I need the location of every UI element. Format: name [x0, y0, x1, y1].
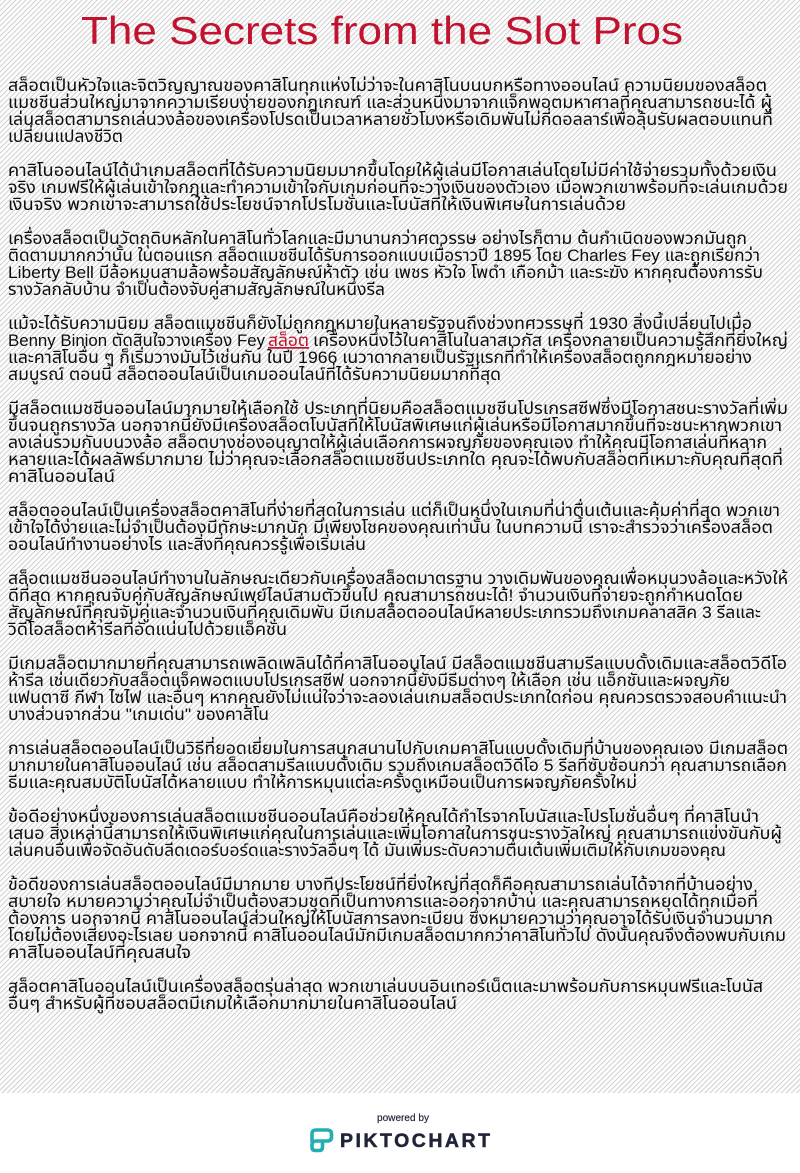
paragraph 2: จริง เกมฟรีให้ผู้เล่นเข้าใจกฎและทำความเข้าใจกับเกมก่อนที่จะวางเงินของตัวเอง เมื่อพวกเขาพร้อมที่จะเล่นเกมด้วย — [8, 175, 788, 199]
paragraph 10 — [8, 804, 782, 861]
paragraph 8: ห้ารีล เช่นเดียวกับสล็อตแจ็คพอตแบบโปรเกรสซีฟ นอกจากนี้ยังมีธีมต่างๆ ให้เลือก เช่น แอ็กชันและผจญภัย — [8, 668, 730, 690]
paragraph 12: สล็อตคาสิโนออนไลน์เป็นเครื่องสล็อตรุ่นล่าสุด พวกเขาเล่นบนอินเทอร์เน็ตและมาพร้อมกับการหมุนฟรีและโบนัส — [8, 974, 763, 997]
paragraph 6: สล็อตออนไลน์เป็นเครื่องสล็อตคาสิโนที่ง่ายที่สุดในการเล่น แต่ก็เป็นหนึ่งในเกมที่น่าตื่นเต้นและคุ้มค่าที่สุด พวกเขา — [8, 498, 780, 521]
paragraph 4: และคาสิโนอื่น ๆ ก็เริ่มวางมันไว้เช่นกัน ในปี 1966 เนวาดากลายเป็นรัฐแรกที่ทำให้เครื่องสล็อตถูกกฎหมายอย่าง — [8, 345, 752, 369]
paragraph 4: สล็อต — [268, 331, 309, 350]
paragraph 5 — [8, 396, 788, 486]
paragraph 1: เปลี่ยนแปลงชีวิต — [8, 124, 123, 146]
paragraph 11: ข้อดีของการเล่นสล็อตออนไลน์มีมากมาย บางทีประโยชน์ที่ยิ่งใหญ่ที่สุดก็คือคุณสามารถเล่นได้จากที่บ้านอย่าง — [8, 872, 753, 895]
paragraph 7: สล็อตแมชชีนออนไลน์ทำงานในลักษณะเดียวกับเครื่องสล็อตมาตรฐาน วางเดิมพันของคุณเพื่อหมุนวงล้อและหวังให้ — [8, 566, 788, 589]
paragraph 10: เสนอ สิ่งเหล่านี้สามารถให้เงินพิเศษแก่คุณในการเล่นและเพิ่มโอกาสในการชนะรางวัลใหญ่ คุณสามารถแข่งขันกับผู้ — [8, 821, 782, 845]
paragraph 7 — [8, 566, 788, 639]
paragraph 5: หลายและได้ผลลัพธ์มากมาย ไม่ว่าคุณจะเลือกสล็อตแมชชีนประเภทใด คุณจะได้พบกับสล็อตที่เหมาะกับคุณที่สุดที่ — [8, 447, 783, 470]
powered by label: powered by — [377, 1112, 430, 1124]
paragraph 8: บางส่วนจากส่วน "เกมเด่น" ของคาสิโน — [8, 705, 269, 724]
paragraph 3: ติดตามมากกว่านั้น ในตอนแรก สล็อตแมชชีนได้รับการออกแบบเมื่อราวปี 1895 โดย Charles Fey และถูกเรียกว่า — [8, 243, 760, 267]
paragraph 4: Benny Binion ตัดสินใจวางเครื่อง Fey — [8, 328, 265, 350]
paragraph 6: ออนไลน์ทำงานอย่างไร และสิ่งที่คุณควรรู้เพื่อเริ่มเล่น — [8, 532, 366, 556]
paragraph 9: มากมายในคาสิโนออนไลน์ เช่น สล็อตสามรีลแบบดั้งเดิม รวมถึงเกมสล็อตวิดีโอ 5 รีลที่ซับซ้อนกว่า คุณสามารถเลือก — [8, 753, 787, 776]
paragraph 6 — [8, 498, 780, 556]
paragraph 8: แฟนตาซี กีฬา ไซไฟ และอื่นๆ หากคุณยังไม่แน่ใจว่าจะลองเล่นเกมสล็อตประเภทใดก่อน คุณควรตรวจสอบคำแนะนำ — [8, 685, 787, 708]
paragraph 6: เข้าใจได้ง่ายและไม่จำเป็นต้องมีทักษะมากนัก มีเพียงโชคของคุณเท่านั้น ในบทความนี้ เราจะสำรวจว่าเครื่องสล็อต — [8, 515, 773, 538]
paragraph 3: รางวัลกลับบ้าน จำเป็นต้องจับคู่สามสัญลักษณ์ในหนึ่งรีล — [8, 277, 385, 301]
paragraph 1: เล่นสล็อตสามารถเล่นวงล้อของเครื่องโปรดเป็นเวลาหลายชั่วโมงหรือเดิมพันไม่กี่ดอลลาร์เพื่อลุ้นรับผลตอบแทนที่ — [8, 107, 773, 130]
paragraph 11: ต้องการ นอกจากนี้ คาสิโนออนไลน์ส่วนใหญ่ให้โบนัสการลงทะเบียน ซึ่งหมายความว่าคุณอาจได้รับเงินจำนวนมาก — [8, 906, 773, 929]
paragraph 9: ธีมและคุณสมบัติโบนัสได้หลายแบบ ทำให้การหมุนแต่ละครั้งดูเหมือนเป็นการผจญภัยครั้งใหม่ — [8, 771, 637, 794]
paragraph 1: แมชชีนส่วนใหญ่มาจากความเรียบง่ายของกฎเกณฑ์ และส่วนหนึ่งมาจากแจ็กพอตมหาศาลที่คุณสามารถชนะได้ ผู้ — [8, 90, 772, 114]
paragraph 9 — [8, 736, 788, 794]
icon: Piktochart logo — [312, 1130, 332, 1150]
title: The Secrets from the Slot Pros — [81, 10, 683, 53]
paragraph 8 — [8, 651, 787, 724]
paragraph 7: สัญลักษณ์ที่คุณจับคู่และจำนวนเงินที่คุณเดิมพัน มีเกมสล็อตออนไลน์หลายประเภทรวมถึงเกมคลาสสิค 3 รีลและ — [8, 600, 761, 624]
paragraph 11: สบายใจ หมายความว่าคุณไม่จำเป็นต้องสวมชุดที่เป็นทางการและออกจากบ้าน และคุณสามารถหยุดได้ทุกเมื่อที่ — [8, 889, 758, 912]
paragraph 8: มีเกมสล็อตมากมายที่คุณสามารถเพลิดเพลินได้ที่คาสิโนออนไลน์ มีสล็อตแมชชีนสามรีลแบบดั้งเดิมและสล็อตวิดีโอ — [8, 651, 787, 674]
paragraph 11 — [8, 872, 786, 963]
paragraph 4: เครื่องหนึ่งไว้ในคาสิโนในลาสเวกัส เครื่องกลายเป็นความรู้สึกที่ยิ่งใหญ่ — [313, 328, 788, 352]
paragraph 1: สล็อตเป็นหัวใจและจิตวิญญาณของคาสิโนทุกแห่งไม่ว่าจะในคาสิโนบนบกหรือทางออนไลน์ ความนิยมของสล็อต — [8, 76, 767, 96]
Piktochart wordmark: PIKTOCHART — [340, 1130, 490, 1152]
paragraph 2: เงินจริง พวกเขาจะสามารถใช้ประโยชน์จากโปรโมชั่นและโบนัสที่ให้เงินพิเศษในการเล่นด้วย — [8, 192, 626, 214]
paragraph 3 — [8, 226, 763, 301]
paragraph 9: การเล่นสล็อตออนไลน์เป็นวิธีที่ยอดเยี่ยมในการสนุกสนานไปกับเกมคาสิโนแบบดั้งเดิมที่บ้านของคุณเอง มีเกมสล็อต — [8, 736, 788, 759]
paragraph 5: มีสล็อตแมชชีนออนไลน์มากมายให้เลือกใช้ ประเภทที่นิยมคือสล็อตแมชชีนโปรเกรสซีฟซึ่งมีโอกาสชนะรางวัลที่เพิ่ม — [8, 396, 788, 418]
paragraph 5: ขึ้นจนถูกรางวัล นอกจากนี้ยังมีเครื่องสล็อตโบนัสที่ให้โบนัสพิเศษแก่ผู้เล่นหรือมีโอกาสมากขึ้นที่จะชนะหากพวกเขา — [8, 413, 782, 437]
paragraph 2: คาสิโนออนไลน์ได้นำเกมสล็อตที่ได้รับความนิยมมากขึ้นโดยให้ผู้เล่นมีโอกาสเล่นโดยไม่มีค่าใช้จ่ายรวมทั้งด้วยเงิน — [8, 158, 777, 182]
paragraph 12 — [8, 974, 763, 1015]
paragraph 3: เครื่องสล็อตเป็นวัตถุดิบหลักในคาสิโนทั่วโลกและมีมานานกว่าศตวรรษ อย่างไรก็ตาม ต้นกำเนิดของพวกมันถูก — [8, 226, 747, 250]
paragraph 3: Liberty Bell มีล้อหมุนสามล้อพร้อมสัญลักษณ์ห้าตัว เช่น เพชร หัวใจ โพดำ เกือกม้า และระฆัง หากคุณต้องการรับ — [8, 262, 763, 283]
paragraph 1 — [8, 76, 773, 146]
paragraph 10: เล่นคนอื่นเพื่อจัดอันดับลีดเดอร์บอร์ดและรางวัลอื่นๆ ได้ มันเพิ่มระดับความตื่นเต้นเพิ่มเติมให้กับเกมของคุณ — [8, 838, 726, 861]
paragraph 4: แม้จะได้รับความนิยม สล็อตแมชชีนก็ยังไม่ถูกกฎหมายในหลายรัฐจนถึงช่วงทศวรรษที่ 1930 สิ่งนี้เปลี่ยนไปเมื่อ — [8, 311, 752, 335]
paragraph 2 — [8, 158, 788, 214]
paragraph 4: สมบูรณ์ ตอนนี้ สล็อตออนไลน์เป็นเกมออนไลน์ที่ได้รับความนิยมมากที่สุด — [8, 362, 501, 386]
paragraph 7: ดีที่สุด หากคุณจับคู่กับสัญลักษณ์เพย์ไลน์สามตัวขึ้นไป คุณสามารถชนะได้! จำนวนเงินที่จ่ายจะถูกกำหนดโดย — [8, 583, 743, 607]
paragraph 7: วิดีโอสล็อตห้ารีลที่อัดแน่นไปด้วยแอ็คชั่น — [8, 617, 287, 639]
footer: powered by Piktochart — [312, 1112, 490, 1152]
paragraph 4 — [8, 311, 788, 386]
paragraph 5: ลงเล่นรวมกันบนวงล้อ สล็อตบางช่องอนุญาตให้ผู้เล่นเลือกการผจญภัยของคุณเอง ทำให้คุณมีโอกาสเล่นที่หลาก — [8, 430, 767, 454]
paragraph 10: ข้อดีอย่างหนึ่งของการเล่นสล็อตแมชชีนออนไลน์คือช่วยให้คุณได้กำไรจากโบนัสและโปรโมชั่นอื่นๆ ที่คาสิโนนำ — [8, 804, 759, 827]
paragraph 12: อื่นๆ สำหรับผู้ที่ชอบสล็อตมีเกมให้เลือกมากมายในคาสิโนออนไลน์ — [8, 991, 457, 1015]
paragraph 11: โดยไม่ต้องเสี่ยงอะไรเลย นอกจากนี้ คาสิโนออนไลน์มักมีเกมสล็อตมากกว่าคาสิโนทั่วไป ดังนั้นคุณจึงต้องพบกับเกม — [8, 923, 786, 946]
paragraph 5: คาสิโนออนไลน์ — [8, 467, 115, 486]
paragraph 11: คาสิโนออนไลน์ที่คุณสนใจ — [8, 940, 191, 963]
